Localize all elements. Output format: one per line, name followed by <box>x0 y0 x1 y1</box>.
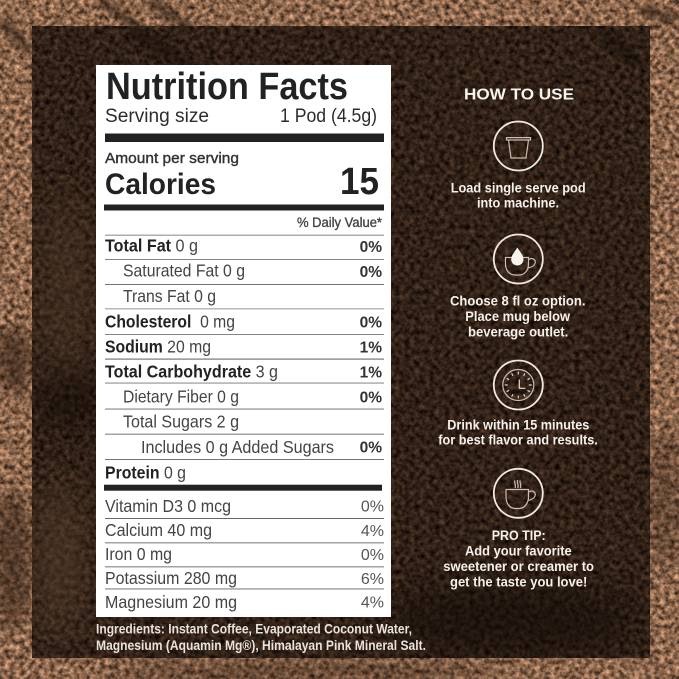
calories row: Calories <box>105 168 216 201</box>
row: trans fat: Trans Fat 0 g <box>123 286 216 306</box>
row: saturated fat <box>123 260 382 281</box>
serving size row: 1 Pod (4.5g) <box>280 106 377 127</box>
row: saturated fat: Saturated Fat 0 g <box>123 260 245 280</box>
serving size row: Serving size <box>105 106 209 127</box>
row: total fat <box>105 236 382 256</box>
row: potassium: 6% <box>361 571 384 588</box>
pro tip text: get the taste you love! <box>450 575 587 590</box>
amount per serving: Amount per serving <box>105 150 239 167</box>
row: cholesterol <box>105 312 382 332</box>
icon: single serve pod <box>494 122 543 170</box>
step 2 text: Place mug below <box>465 309 570 324</box>
row: vitamin d3: 0% <box>361 498 384 516</box>
row: potassium <box>105 568 384 588</box>
ingredients text: Ingredients: Instant Coffee, Evaporated Coconut Water, <box>96 620 412 636</box>
heading: how to use: HOW TO USE <box>464 86 574 104</box>
calories row <box>105 161 379 203</box>
row: total sugars: Total Sugars 2 g <box>123 412 239 432</box>
row: dietary fiber: Dietary Fiber 0 g <box>123 386 239 406</box>
pro tip text: sweetener or creamer to <box>443 559 594 574</box>
step 2 text <box>450 294 586 340</box>
panel: nutrition facts label <box>96 65 391 617</box>
step 2 text: beverage outlet. <box>468 325 568 340</box>
row: sodium: 1% <box>360 340 382 356</box>
row: magnesium: 4% <box>361 594 384 612</box>
row: cholesterol: Cholesterol 0 mg <box>105 312 235 332</box>
title: Nutrition Facts: Nutrition Facts <box>106 66 348 108</box>
row: total carbohydrate <box>105 362 382 382</box>
row: magnesium: Magnesium 20 mg <box>105 592 237 612</box>
row: protein: Protein 0 g <box>105 462 186 482</box>
row: vitamin d3: Vitamin D3 0 mcg <box>105 496 231 516</box>
icon: mug with drop <box>494 234 543 284</box>
pro tip text: Add your favorite <box>465 544 572 559</box>
row: iron <box>105 544 384 564</box>
row: total carbohydrate: Total Carbohydrate 3 g <box>105 362 278 382</box>
pro tip text: PRO TIP: <box>492 528 546 543</box>
step 3 text: for best flavor and results. <box>438 432 598 447</box>
row: iron: Iron 0 mg <box>105 544 172 564</box>
row: sodium <box>105 336 382 356</box>
step 1 text: into machine. <box>477 196 559 211</box>
step 1 text <box>451 180 586 211</box>
row: total fat: 0% <box>360 239 382 256</box>
icon: clock <box>494 360 543 410</box>
pro tip text <box>443 528 594 590</box>
row: iron: 0% <box>361 547 384 564</box>
row: magnesium <box>105 592 384 612</box>
row: vitamin d3 <box>105 496 384 516</box>
row: calcium <box>105 520 384 540</box>
icon: steaming cup <box>494 469 543 518</box>
step 1 text: Load single serve pod <box>451 180 586 195</box>
row: cholesterol: 0% <box>360 314 382 332</box>
row: calcium: 4% <box>361 523 384 540</box>
ingredients text <box>96 620 426 653</box>
daily value header: % Daily Value* <box>297 215 383 230</box>
step 3 text <box>438 417 598 447</box>
row: potassium: Potassium 280 mg <box>105 568 237 588</box>
row: saturated fat: 0% <box>360 264 382 281</box>
row: calcium: Calcium 40 mg <box>105 520 212 540</box>
row: dietary fiber: 0% <box>360 390 382 406</box>
row: added sugars: 0% <box>360 440 382 456</box>
row: sodium: Sodium 20 mg <box>105 336 211 356</box>
row: total fat: Total Fat 0 g <box>105 236 198 256</box>
calories row: 15 <box>340 161 379 203</box>
row: total carbohydrate: 1% <box>360 364 382 382</box>
row: dietary fiber <box>123 386 382 406</box>
serving size row <box>105 106 377 127</box>
step 3 text: Drink within 15 minutes <box>447 417 589 432</box>
ingredients text: Magnesium (Aquamin Mg®), Himalayan Pink Mineral Salt. <box>96 637 426 653</box>
row: added sugars: Includes 0 g Added Sugars <box>141 437 334 457</box>
step 2 text: Choose 8 fl oz option. <box>450 294 586 309</box>
